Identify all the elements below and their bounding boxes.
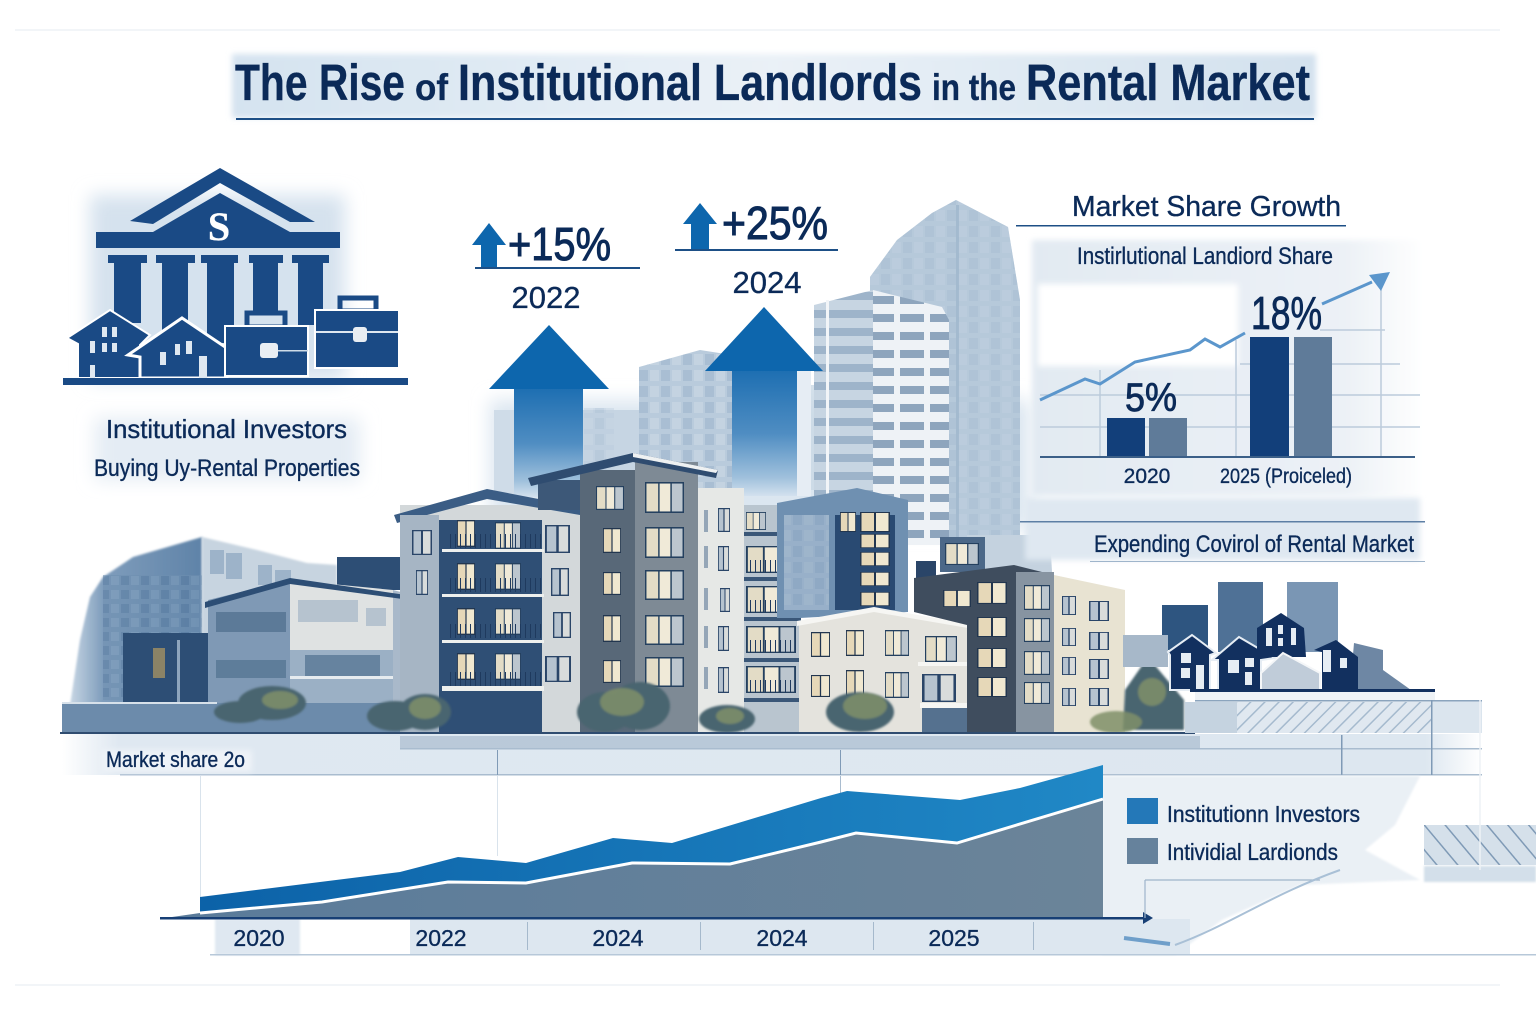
bars 2020: 5% bbox=[1125, 376, 1177, 420]
stat: +15% 2022: +15% bbox=[508, 218, 611, 270]
growth arrow 2024 bbox=[705, 307, 823, 496]
bars 2025: 18% bbox=[1251, 287, 1322, 339]
area chart bbox=[160, 765, 1536, 956]
apartment building: left block bbox=[394, 489, 580, 733]
briefcase two bbox=[315, 298, 399, 368]
area: institutional investors bbox=[200, 765, 1103, 913]
apartment building: front low block bbox=[797, 607, 975, 733]
expanding control heading: Expending Covirol of Rental Market bbox=[1094, 531, 1414, 558]
bank columns bbox=[108, 255, 329, 343]
chart axis bbox=[160, 912, 1536, 956]
institutional investors caption bbox=[94, 414, 360, 482]
middle house bbox=[128, 318, 240, 378]
chart year labels: 2024 bbox=[592, 925, 644, 951]
house: back bbox=[1257, 613, 1306, 657]
bar axis labels: 2025 (Proiceled) bbox=[1220, 465, 1352, 488]
market share label: Market share 2o bbox=[106, 747, 245, 772]
institutional investors caption: Institutional Investors bbox=[106, 414, 347, 444]
legend: Intividial Lardionds bbox=[1167, 839, 1338, 865]
planter wall bbox=[62, 703, 452, 733]
dollar emblem: S bbox=[208, 204, 230, 249]
chart year labels bbox=[233, 925, 980, 951]
background skyline towers bbox=[490, 200, 1030, 545]
stat: +15% 2022 bbox=[472, 218, 640, 315]
bank roof bbox=[96, 168, 340, 248]
title banner bbox=[232, 54, 1316, 120]
low modern building bbox=[205, 578, 440, 705]
dark lower block bbox=[123, 633, 210, 703]
neighbourhood skyline and houses bbox=[1123, 582, 1435, 692]
icon: bank with houses and briefcases bbox=[63, 168, 408, 385]
house: left bbox=[1168, 635, 1216, 690]
bars 2020 bbox=[1107, 376, 1187, 457]
expanding control heading bbox=[1020, 498, 1425, 562]
briefcase one bbox=[225, 313, 308, 376]
legend: Institutionn Investors bbox=[1167, 801, 1360, 827]
trend arrow bbox=[1040, 272, 1390, 400]
chart year labels: 2025 bbox=[928, 925, 980, 951]
apartment building: cream block with balconies bbox=[698, 488, 801, 733]
apartment building: right block bbox=[914, 535, 1125, 733]
icon ground line bbox=[63, 378, 408, 385]
bar axis labels bbox=[1124, 465, 1352, 488]
panel heading: Market Share Growth bbox=[1072, 191, 1341, 223]
title banner: Institutional Landlords bbox=[458, 54, 922, 111]
chart year labels: 2022 bbox=[415, 925, 467, 951]
stat: +25% 2024: 2024 bbox=[733, 265, 801, 300]
right pale chart panel bbox=[1102, 776, 1420, 955]
bottom right sketch detail bbox=[1124, 825, 1536, 945]
divider line bbox=[200, 799, 1103, 913]
trees bbox=[214, 657, 1184, 733]
left faded buildings bbox=[62, 537, 452, 733]
ground strip bbox=[60, 692, 1482, 776]
chart year labels: 2024 bbox=[756, 925, 808, 951]
chart year labels: 2020 bbox=[233, 925, 285, 951]
stat: +25% 2024 bbox=[675, 197, 838, 300]
title banner: of bbox=[415, 67, 449, 108]
house: centre bbox=[1212, 637, 1275, 690]
apartment building: glass block bbox=[777, 488, 908, 618]
title banner: The Rise bbox=[235, 54, 405, 111]
institutional investors caption: Buying Uy-Rental Properties bbox=[94, 455, 360, 482]
back building bbox=[70, 537, 337, 705]
house: pale bbox=[1261, 653, 1320, 690]
market share growth panel bbox=[1016, 191, 1424, 496]
stat: +15% 2022: 2022 bbox=[512, 280, 580, 315]
apartment building: central grey block bbox=[528, 453, 718, 733]
legend bbox=[1127, 798, 1360, 865]
house: right bbox=[1314, 640, 1358, 690]
bars 2025 bbox=[1250, 287, 1332, 457]
growth arrow 2022 bbox=[489, 325, 609, 497]
area: individual landlords bbox=[165, 799, 1103, 918]
panel subheading: Instirlutional Landiord Share bbox=[1077, 243, 1333, 270]
title banner: Rental Market bbox=[1026, 54, 1310, 111]
title banner: in the bbox=[932, 67, 1016, 108]
bar axis labels: 2020 bbox=[1124, 465, 1170, 488]
stat: +25% 2024: +25% bbox=[722, 197, 828, 249]
left house bbox=[67, 310, 150, 378]
